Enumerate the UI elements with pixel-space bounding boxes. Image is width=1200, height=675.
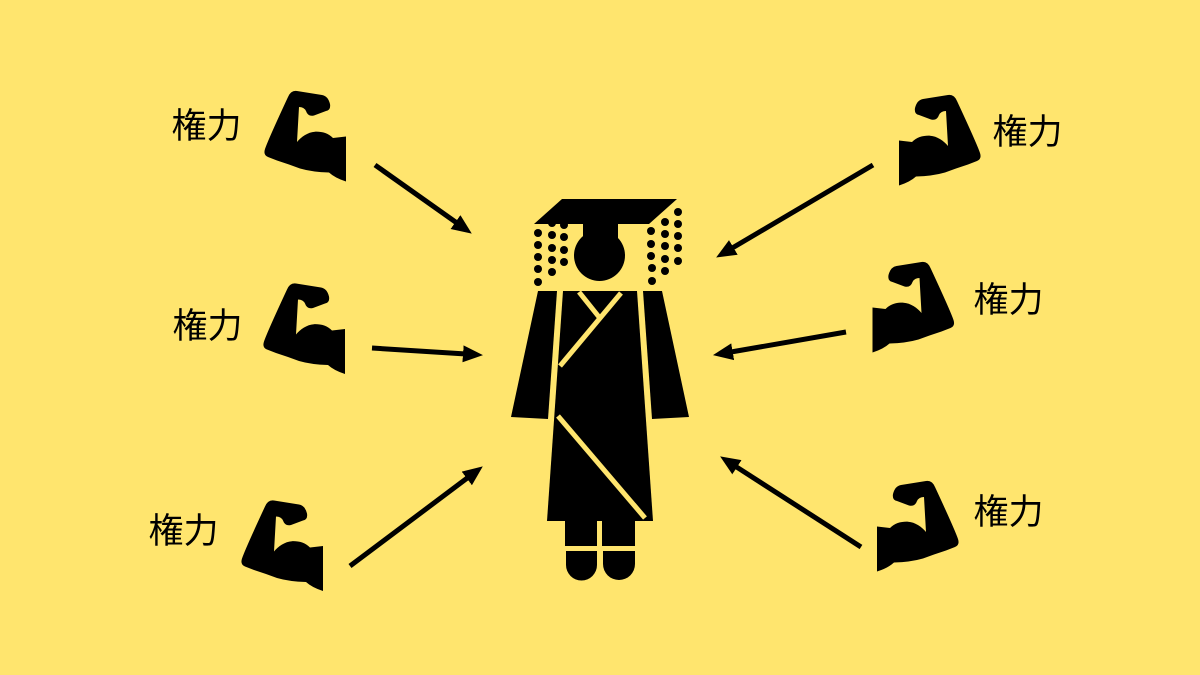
robe — [547, 291, 653, 521]
label: bottom right: 権力 — [974, 493, 1044, 532]
arrow: middle right — [732, 332, 846, 352]
icon: flexed arm middle right — [872, 262, 954, 352]
hair dots left — [534, 219, 568, 286]
icon: flexed arm bottom right — [877, 481, 959, 572]
icon: flexed arm middle left — [263, 283, 345, 374]
legs — [565, 520, 635, 546]
icon: flexed arm top right — [899, 95, 981, 186]
hat and head — [534, 199, 677, 281]
arrow: bottom right — [736, 467, 861, 547]
arrow: middle left — [372, 348, 464, 354]
arrow: top left — [375, 165, 456, 223]
label: top right: 権力 — [992, 113, 1063, 152]
left sleeve — [511, 291, 557, 419]
label: middle right: 権力 — [974, 281, 1044, 320]
feet — [566, 551, 635, 580]
arrow: bottom left — [350, 478, 468, 566]
central figure: robed person with square hat — [511, 199, 689, 580]
arrow: top right — [732, 165, 873, 248]
label: middle left: 権力 — [172, 307, 243, 346]
robe lines — [558, 292, 645, 518]
icon: flexed arm bottom left — [241, 500, 323, 591]
icon: flexed arm top left — [264, 91, 346, 182]
label: bottom left: 権力 — [148, 512, 219, 551]
label: top left: 権力 — [172, 107, 242, 146]
right sleeve — [643, 291, 689, 419]
hair dots right — [647, 208, 682, 285]
